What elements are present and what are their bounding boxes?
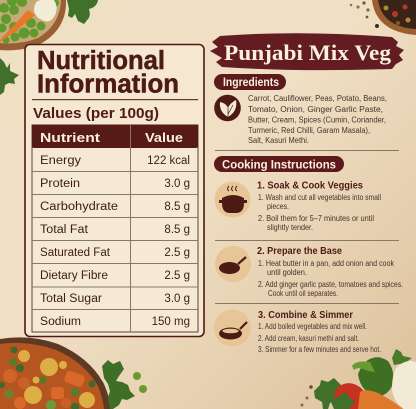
step 1: slightly tender. <box>267 223 313 232</box>
row: total fat: 8.5 g <box>164 224 190 236</box>
heading: nutritional information: Information <box>37 70 179 98</box>
step 3: 3. Combine & Simmer <box>258 309 353 321</box>
icon: pan with cream <box>214 310 251 346</box>
row: sodium: Sodium <box>40 316 81 328</box>
curry bowl <box>0 337 111 409</box>
row: total sugar <box>40 293 190 305</box>
step 2: 2. Prepare the Base <box>257 245 342 257</box>
row: dietary fibre: Dietary Fibre <box>40 270 108 282</box>
step 1 <box>214 180 381 232</box>
parsley top <box>67 0 98 24</box>
parsley bottom <box>102 360 135 409</box>
row: carbohydrate <box>40 201 190 213</box>
icon: leaf <box>214 95 241 121</box>
step 3: 3. Simmer for a few minutes and serve hot. <box>258 345 381 354</box>
table header: Value <box>145 130 183 145</box>
row: saturated fat <box>40 247 190 259</box>
row: saturated fat: Saturated Fat <box>40 247 111 259</box>
panel: nutritional information <box>25 44 204 336</box>
row: saturated fat: 2.5 g <box>164 247 190 259</box>
row: protein <box>40 178 190 190</box>
ingredients text: Butter, Cream, Spices (Cumin, Coriander, <box>248 116 386 124</box>
row: total fat: Total Fat <box>40 224 89 236</box>
row: protein: 3.0 g <box>164 178 190 190</box>
nutrition table <box>32 124 198 332</box>
bowl of peas and carrot <box>0 0 66 50</box>
cooking instructions pill: Cooking Instructions <box>222 158 336 172</box>
ingredients text: Turmeric, Red Chilli, Garam Masala), <box>248 126 370 135</box>
step 3: 1. Add boiled vegetables and mix well. <box>258 322 367 331</box>
table header <box>32 124 198 148</box>
row: total fat <box>40 224 190 236</box>
step 3: 2. Add cream, kasuri methi and salt. <box>258 334 359 343</box>
row: total sugar: 3.0 g <box>164 293 190 305</box>
ingredients pill <box>214 74 286 90</box>
row: energy: Energy <box>40 155 81 167</box>
table header: Nutrient <box>40 130 101 145</box>
row: energy <box>40 155 190 167</box>
row: protein: Protein <box>40 178 80 190</box>
icon: pan <box>215 246 251 282</box>
row: energy: 122 kcal <box>147 155 190 167</box>
step 1: 1. Wash and cut all vegetables into small <box>258 193 381 202</box>
step 3 <box>214 309 381 354</box>
step 2: 1. Heat butter in a pan, add onion and cook <box>258 259 395 268</box>
row: dietary fibre: 2.5 g <box>164 270 190 282</box>
icon: pot <box>214 182 250 218</box>
step 2 <box>215 245 403 298</box>
heading: nutritional information <box>37 47 179 98</box>
row: sodium <box>40 316 190 328</box>
subheading: values per 100g: Values (per 100g) <box>33 105 159 122</box>
parsley left <box>0 58 19 95</box>
step 1: 2. Boil them for 5–7 minutes or until <box>258 214 374 223</box>
ingredients text <box>248 94 387 145</box>
ingredients text: Salt, Kasuri Methi. <box>248 136 309 145</box>
step 1: pieces. <box>267 202 289 211</box>
peas <box>133 372 147 393</box>
ingredients pill: Ingredients <box>223 77 279 89</box>
row: carbohydrate: 8.5 g <box>164 201 190 213</box>
row: sodium: 150 mg <box>152 316 190 328</box>
ingredients text: Carrot, Cauliflower, Peas, Potato, Beans, <box>248 94 387 103</box>
ingredients text: Tomato, Onion, Ginger Garlic Paste, <box>248 105 383 114</box>
row: total sugar: Total Sugar <box>40 293 102 305</box>
row: carbohydrate: Carbohydrate <box>40 201 118 213</box>
step 1: 1. Soak & Cook Veggies <box>257 180 363 192</box>
row: dietary fibre <box>40 270 190 282</box>
vegetables bottom right <box>300 349 416 409</box>
step 2: Cook until oil separates. <box>268 289 338 298</box>
step 2: until golden. <box>267 268 307 277</box>
title banner <box>210 33 404 70</box>
peppercorn bowl <box>350 0 416 35</box>
heading: nutritional information: Nutritional <box>37 47 165 75</box>
title banner: Punjabi Mix Veg <box>224 40 392 65</box>
